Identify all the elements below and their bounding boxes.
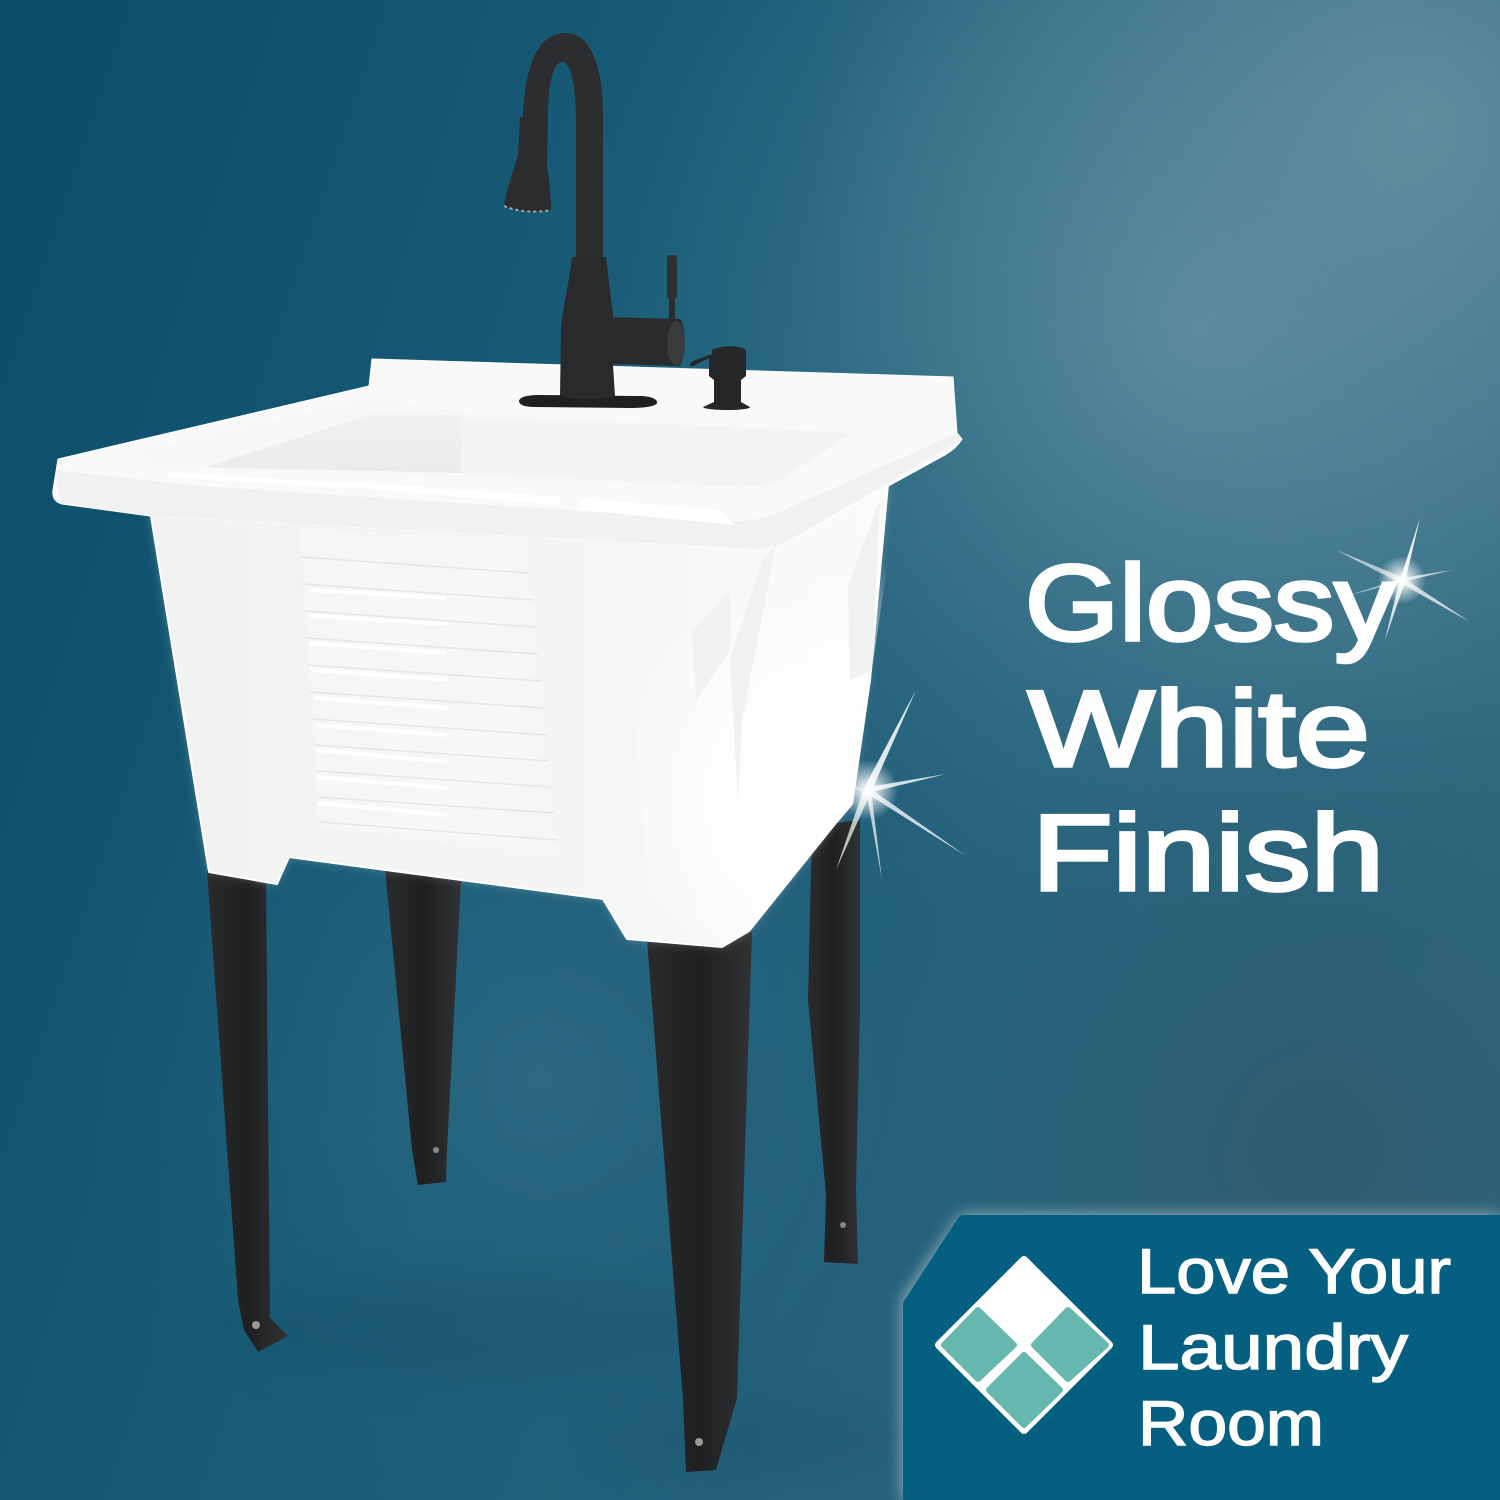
front right leg [647,932,752,1472]
back left leg [385,868,461,1185]
icon: sparkle lower [770,690,966,880]
panel: brand badge [903,1215,1500,1500]
faucet plate [519,395,657,408]
brand text: Love Your [1137,1237,1451,1307]
gloss reflections [167,472,735,525]
icon: black faucet [504,33,685,408]
icon: soap dispenser [690,346,750,410]
brand text: Laundry [1138,1313,1409,1383]
heading: Glossy White Finish [1025,542,1395,913]
back right leg [808,820,860,1264]
sink deck and rim [53,359,962,550]
heading: Glossy White Finish: Finish [1032,792,1384,913]
faucet handle [588,317,684,366]
faucet gooseneck [523,33,603,258]
faucet body [560,257,615,399]
sink legs [207,820,860,1472]
rim front face [56,433,962,550]
soft glow around tub [150,484,888,947]
heading: Glossy White Finish: White [1028,668,1370,789]
basin [135,398,852,487]
icon: diamond logo [939,1260,1109,1430]
front left leg [207,870,288,1352]
white utility sink tub [53,359,962,947]
floor shadow [220,1280,920,1470]
icon: sparkle upper [1336,518,1470,640]
washboard panel [301,528,556,860]
brand text: Room [1138,1389,1324,1459]
faucet spray head [504,117,551,211]
heading: Glossy White Finish: Glossy [1025,542,1395,663]
brand text [1137,1237,1451,1459]
tub body [150,484,888,947]
